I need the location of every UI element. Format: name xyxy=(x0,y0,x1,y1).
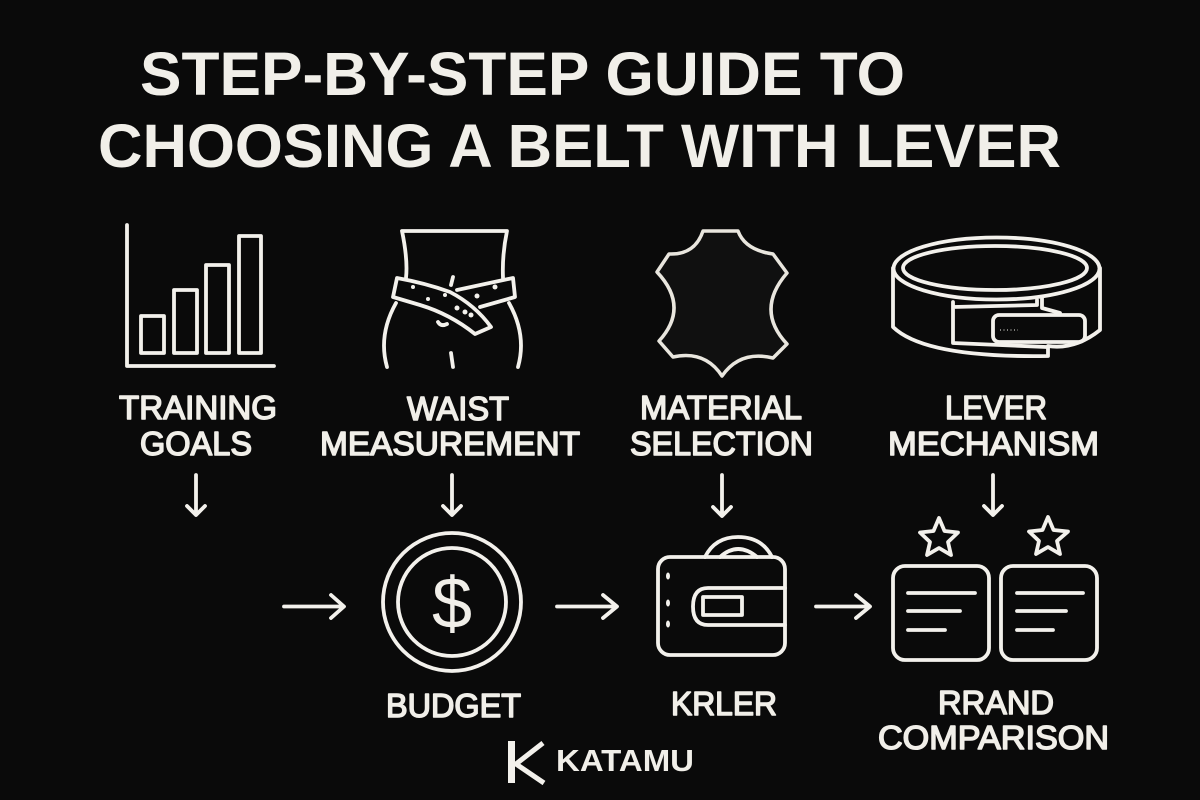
arrow: right into brand comparison xyxy=(816,595,870,618)
icon: waist with measuring belt xyxy=(384,231,521,367)
icon: dollar coin xyxy=(383,533,521,671)
icon: comparison card right xyxy=(1001,566,1097,660)
label: training goals xyxy=(119,389,277,462)
icon: star right xyxy=(1029,517,1068,554)
icon: leather hide xyxy=(657,231,787,376)
label: waist measurement xyxy=(320,390,580,462)
icon: comparison card left xyxy=(893,566,989,660)
label: waist measurement: MEASUREMENT xyxy=(320,425,580,462)
arrow: down from lever mechanism xyxy=(984,475,1002,515)
title: CHOOSING A BELT WITH LEVER xyxy=(98,112,1061,180)
label: material selection xyxy=(630,389,813,462)
title xyxy=(98,40,1061,180)
label: lever mechanism xyxy=(888,389,1099,462)
label: brand comparison: RRAND xyxy=(938,684,1054,721)
label: training goals: GOALS xyxy=(140,425,252,462)
label: lever mechanism: LEVER xyxy=(945,389,1047,426)
label: lever mechanism: MECHANISM xyxy=(888,425,1099,462)
label: budget: BUDGET xyxy=(386,687,521,724)
label: waist measurement: WAIST xyxy=(407,390,509,427)
label: training goals: TRAINING xyxy=(119,389,277,426)
arrow: down from training goals xyxy=(187,475,205,515)
icon: bar chart for training goals xyxy=(127,225,274,366)
label: brand comparison: COMPARISON xyxy=(878,719,1109,756)
arrow: down from waist measurement xyxy=(443,475,461,515)
label: material selection: SELECTION xyxy=(630,425,813,462)
icon: dollar coin: $ xyxy=(432,564,472,644)
label: brand comparison xyxy=(878,684,1109,756)
label: material selection: MATERIAL xyxy=(640,389,802,426)
logo: katamu xyxy=(512,741,694,783)
arrow: down from material selection xyxy=(713,475,731,516)
icon: belt buckle bag xyxy=(658,537,785,655)
icon: star left xyxy=(920,518,958,555)
arrow: right into budget xyxy=(284,595,344,618)
label: krler: KRLER xyxy=(671,685,777,722)
logo: katamu: KATAMU xyxy=(556,743,694,778)
icon: K mark xyxy=(512,741,544,783)
title: STEP-BY-STEP GUIDE TO xyxy=(140,40,905,108)
icon: lever belt xyxy=(893,238,1100,356)
arrow: right into krler xyxy=(557,595,617,618)
